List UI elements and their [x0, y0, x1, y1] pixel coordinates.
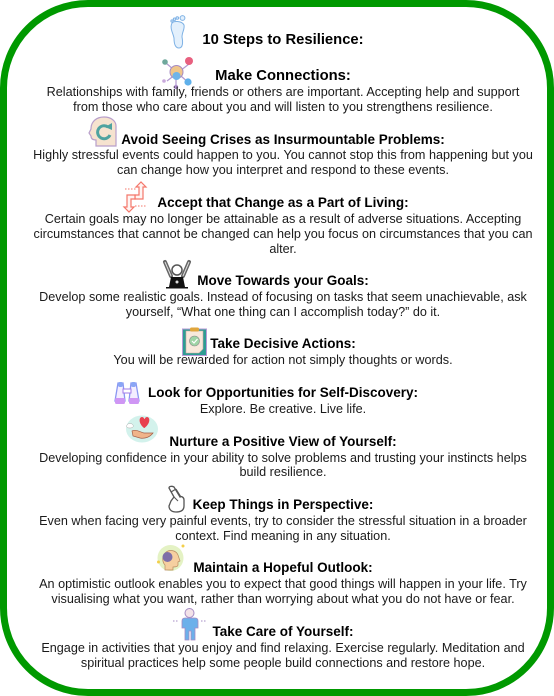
- step 5: take decisive actions: [113, 328, 453, 367]
- icon: hand holding heart: [126, 416, 158, 442]
- heading: positive view: Nurture a Positive View of Yourself:: [169, 434, 397, 449]
- text: yourself, “What one thing can I accomplish today?” do it.: [126, 305, 440, 319]
- text: take care: Engage in activities that you enjoy and find relaxing. Exercise regularly. Meditation and: [41, 641, 525, 655]
- icon: person standing: [173, 608, 206, 640]
- icon: head with arrow: [88, 116, 117, 147]
- icon: two way arrows: [122, 181, 148, 213]
- text: circumstances that cannot be changed can help you focus on circumstances that you can: [34, 227, 532, 241]
- text: avoid seeing crises: Highly stressful events could happen to you. You cannot stop this from happening but you: [33, 148, 533, 162]
- step 2: avoid seeing crises: [33, 116, 533, 177]
- heading: perspective: Keep Things in Perspective:: [193, 497, 373, 512]
- text: build resilience.: [239, 465, 327, 479]
- text: self-discovery: Explore. Be creative. Live life.: [200, 402, 366, 416]
- text: make connections: Relationships with family, friends or others are important. Accepting help and support: [47, 85, 519, 99]
- icon: crossed fingers: [168, 486, 185, 513]
- text: accept change: Certain goals may no longer be attainable as a result of adverse situations. Accepting: [45, 212, 521, 226]
- heading: hopeful outlook: Maintain a Hopeful Outlook:: [193, 560, 373, 575]
- heading: accept change: Accept that Change as a Part of Living:: [157, 195, 409, 210]
- text: hopeful outlook: An optimistic outlook enables you to expect that good things will happen in your life. Try: [39, 577, 527, 591]
- step 4: move towards goals: [39, 260, 527, 319]
- step 9: hopeful outlook: [39, 544, 527, 606]
- text: context. Find meaning in any situation.: [175, 529, 391, 543]
- text: visualising what you want, rather than worrying about what you do not have or fear.: [51, 592, 515, 606]
- icon: binoculars: [114, 382, 140, 404]
- text: can change how you interpret and respond to these events.: [117, 163, 449, 177]
- icon: connections network: [162, 57, 193, 90]
- heading: make connections: Make Connections:: [215, 68, 351, 84]
- step 10: take care: [41, 608, 525, 670]
- heading: take care: Take Care of Yourself:: [212, 624, 354, 639]
- step 6: self-discovery: [114, 382, 418, 416]
- text: from those who care about you and will listen to you strengthens resilience.: [73, 100, 493, 114]
- text: perspective: Even when facing very painful events, try to consider the stressful situation in a broader: [39, 514, 527, 528]
- step 3: accept change: [34, 181, 532, 256]
- icon: hopeful head: [157, 544, 184, 571]
- text: alter.: [269, 242, 297, 256]
- text: take decisive actions: You will be rewarded for action not simply thoughts or words.: [113, 353, 453, 367]
- step 7: positive view: [39, 416, 527, 479]
- step 1: make connections: [47, 57, 520, 114]
- text: positive view: Developing confidence in your ability to solve problems and trusting your instincts helps: [39, 451, 527, 465]
- text: spiritual practices help some people build connections and restore hope.: [81, 656, 485, 670]
- icon: clipboard with check: [182, 328, 207, 356]
- heading: avoid seeing crises: Avoid Seeing Crises as Insurmountable Problems:: [121, 132, 445, 147]
- text: move towards goals: Develop some realistic goals. Instead of focusing on tasks that seem unachievable, ask: [39, 290, 527, 304]
- icon: footprint: [170, 15, 186, 48]
- heading: self-discovery: Look for Opportunities for Self-Discovery:: [148, 385, 418, 400]
- icon: person at laptop with raised arms: [162, 260, 192, 288]
- heading: move towards goals: Move Towards your Goals:: [197, 273, 369, 288]
- title: 10 Steps to Resilience:: [202, 32, 364, 48]
- step 8: perspective: [39, 486, 527, 543]
- heading: take decisive actions: Take Decisive Actions:: [210, 336, 356, 351]
